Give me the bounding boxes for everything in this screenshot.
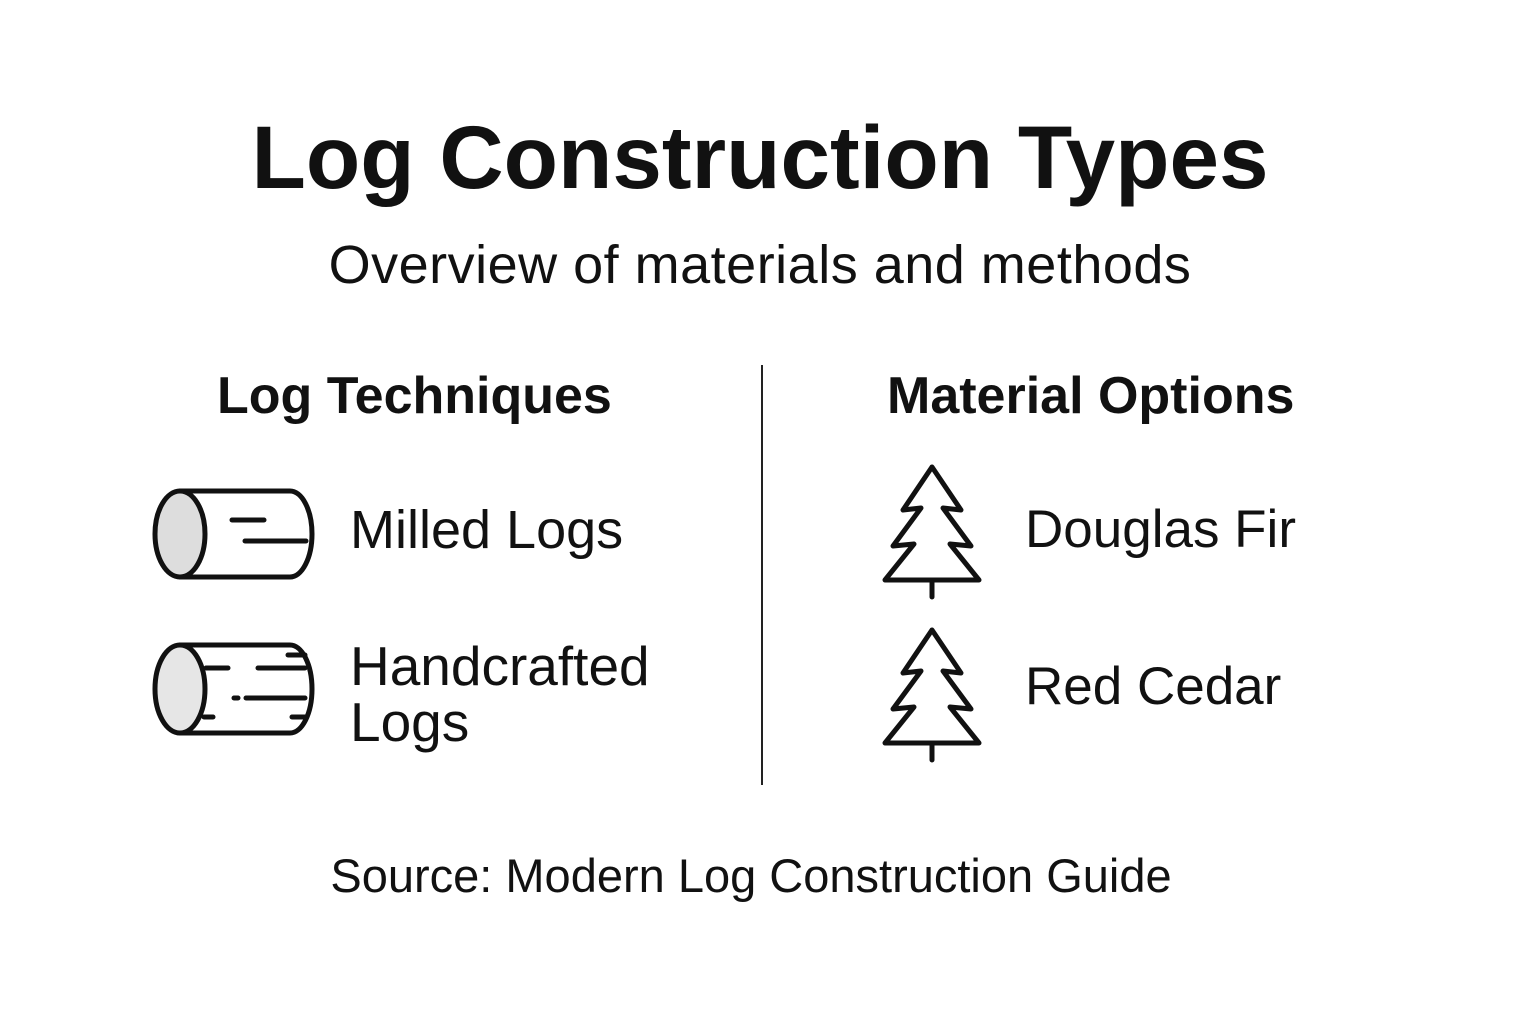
heading: log techniques: Log Techniques: [217, 367, 612, 425]
title: Log Construction Types: [252, 107, 1268, 207]
label: milled logs: Milled Logs: [350, 500, 623, 560]
heading: material options: Material Options: [887, 367, 1294, 425]
divider: [761, 365, 763, 785]
label: red cedar: Red Cedar: [1025, 657, 1281, 716]
label: handcrafted logs: Handcrafted: [350, 635, 650, 697]
label: handcrafted logs: [350, 635, 650, 753]
label: douglas fir: Douglas Fir: [1025, 500, 1296, 559]
subtitle: Overview of materials and methods: [329, 235, 1191, 295]
label: handcrafted logs: Logs: [350, 691, 469, 753]
source: Source: Modern Log Construction Guide: [330, 849, 1172, 902]
